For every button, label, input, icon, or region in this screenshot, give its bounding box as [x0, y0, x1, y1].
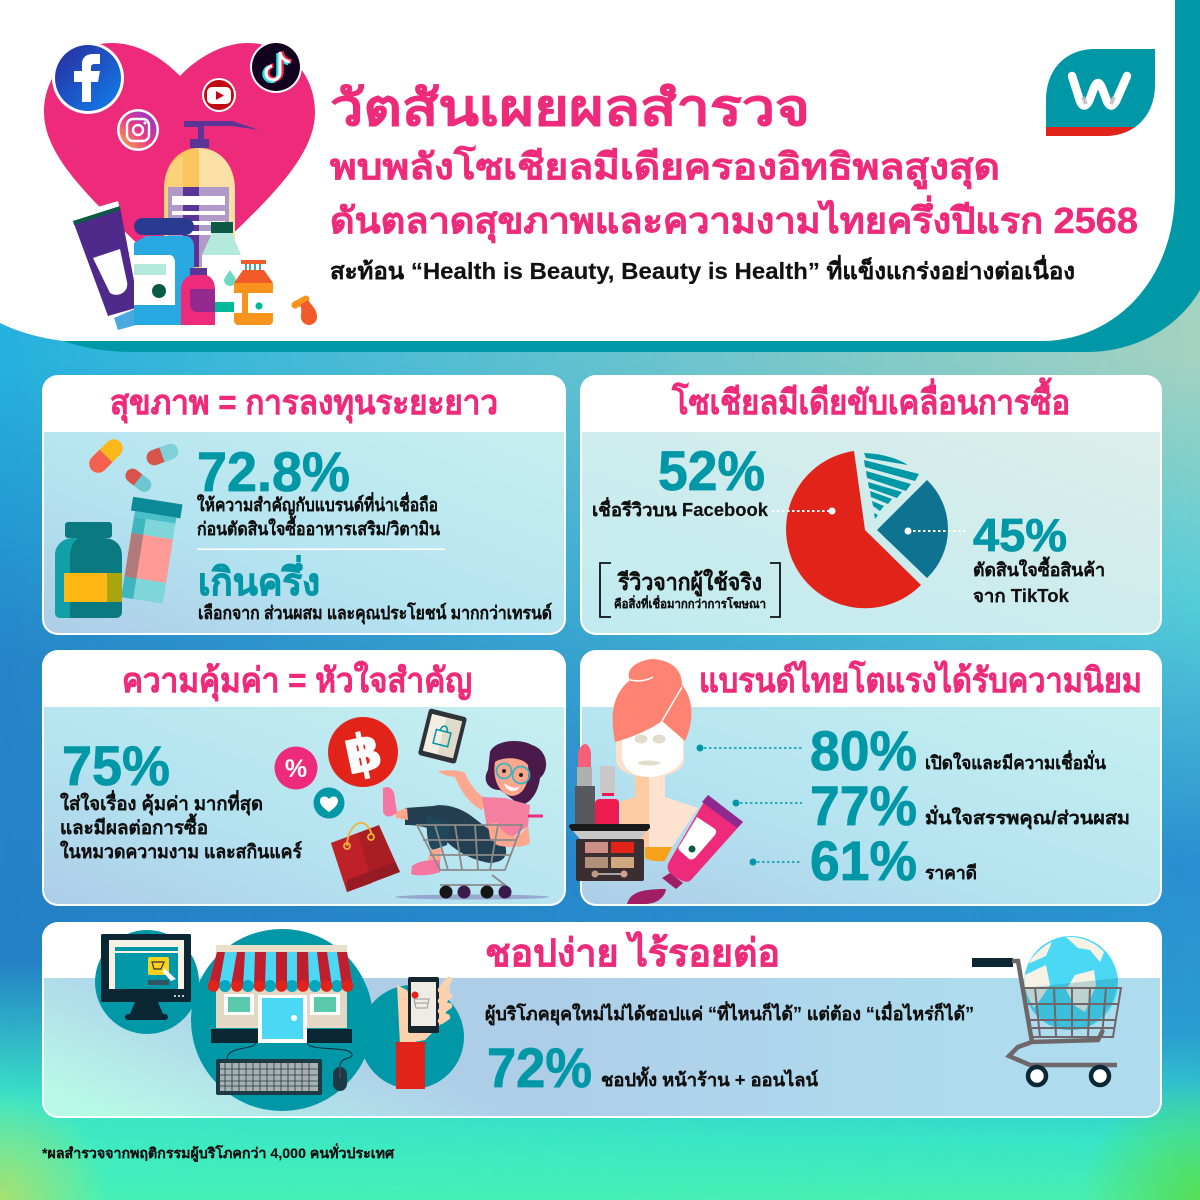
icon: lipstick	[575, 744, 595, 826]
subtitle line 2: ดันตลาดสุขภาพและความงามไทยครึ่งปีแรก 2568	[330, 195, 1138, 244]
text: value detail: ในหมวดความงาม และสกินแคร์	[60, 840, 303, 863]
cart basket	[417, 825, 522, 885]
icon: shopping bag	[331, 823, 400, 892]
stat 80%: 80%	[810, 719, 917, 782]
icon: teal bottle	[55, 522, 122, 618]
panel: health is investment	[42, 375, 566, 635]
pump bottle	[164, 121, 259, 290]
panel: Thai brands	[569, 650, 1162, 906]
text: consumers: ผู้บริโภคยุคใหม่ไม่ได้ชอปแค่ “ที่ไหนก็ได้” แต่ต้อง “เมื่อไหร่ก็ได้”	[485, 1001, 974, 1026]
icon: facebook	[52, 42, 124, 114]
illustration: globe in cart	[972, 936, 1121, 1085]
stat 72%: 72%	[487, 1036, 592, 1099]
text: tiktok decision: จาก TikTok	[973, 586, 1070, 606]
panel: value for money	[42, 650, 566, 906]
leaf	[627, 889, 666, 904]
stat 72.8%: 72.8%	[197, 440, 350, 503]
illustration: face mask woman	[613, 659, 698, 861]
callout: real user reviews: คือสิ่งที่เชื่อมากกว่าการโฆษณา	[614, 595, 766, 611]
icon: keyboard	[216, 1043, 352, 1095]
text: facebook reviews: เชื่อรีวิวบน Facebook	[592, 497, 769, 520]
face	[616, 735, 684, 777]
heading: โซเชียลมีเดียขับเคลื่อนการซื้อ	[671, 377, 1070, 422]
legs	[405, 805, 506, 863]
heading: ชอปง่าย ไร้รอยต่อ	[485, 931, 780, 975]
stat 61%: 61%	[810, 829, 917, 892]
page background	[0, 290, 1200, 1200]
pink bottle	[181, 268, 215, 325]
towel	[613, 659, 691, 742]
tube	[71, 201, 139, 330]
icon: computer	[101, 934, 191, 1020]
stat 77%: มั่นใจสรรพคุณ/ส่วนผสม	[925, 805, 1130, 830]
text: trusted brands	[197, 492, 441, 539]
callout: real user reviews	[600, 563, 780, 617]
orange collar	[645, 847, 672, 861]
icon: hand with phone	[396, 977, 450, 1089]
illustration: heart with products	[44, 41, 317, 330]
connector 61%	[750, 858, 802, 866]
stat 77%	[810, 774, 1130, 837]
stat 77%: 77%	[810, 774, 917, 837]
text: value detail: และมีผลต่อการซื้อ	[60, 813, 208, 839]
icon: nail polish	[595, 766, 619, 826]
wheels	[440, 886, 512, 898]
stat 80%	[810, 719, 1107, 782]
neck and shoulders	[620, 770, 698, 847]
title: วัตสันเผยผลสำรวจ	[330, 80, 810, 136]
heading: สุขภาพ = การลงทุนระยะยาว	[110, 384, 498, 424]
icon: tiktok	[250, 41, 302, 93]
shoes	[383, 787, 397, 816]
header band shape	[63, 0, 1200, 352]
icon: baht coin: ฿	[340, 722, 387, 786]
panel: header	[0, 0, 1175, 341]
panel: social media drives purchase	[580, 375, 1162, 635]
callout: real user reviews: รีวิวจากผู้ใช้จริง	[616, 568, 762, 597]
text: tiktok decision	[973, 556, 1105, 606]
panel: seamless shopping	[42, 922, 1162, 1118]
illustration: omnichannel	[95, 929, 464, 1111]
icon: pills	[85, 435, 181, 495]
icon: youtube	[202, 78, 236, 112]
stat 75%: 75%	[62, 734, 170, 797]
orange bottle	[234, 260, 273, 325]
stat more than half: เกินครึ่ง	[198, 555, 320, 604]
arm on cart	[488, 822, 530, 847]
icon: percent: %	[285, 755, 307, 783]
icon: percent	[274, 746, 318, 790]
stat 80%: เปิดใจและมีความเชื่อมั่น	[925, 750, 1107, 773]
tagline: สะท้อน “Health is Beauty, Beauty is Health” ที่แข็งแกร่งอย่างต่อเนื่อง	[330, 254, 1075, 284]
dropper	[295, 299, 317, 325]
pie chart	[772, 451, 968, 608]
logo: Watsons	[1046, 49, 1155, 136]
text: trusted brands: ก่อนตัดสินใจซื้ออาหารเสริม/วิตามิน	[197, 515, 441, 539]
illustration: woman in cart	[383, 741, 549, 900]
face and neck	[494, 758, 528, 796]
text: tiktok decision: ตัดสินใจซื้อสินค้า	[973, 556, 1105, 580]
connector 80%	[696, 744, 802, 752]
white bottle	[202, 222, 241, 312]
stat 45%: 45%	[973, 509, 1067, 561]
heading: แบรนด์ไทยโตแรงได้รับความนิยม	[699, 660, 1142, 700]
cart shadow	[395, 894, 549, 900]
text: trusted brands: ให้ความสำคัญกับแบรนด์ที่น่าเชื่อถือ	[197, 492, 438, 516]
text: value detail	[60, 790, 303, 863]
stat 52%: 52%	[658, 439, 765, 502]
shirt	[482, 797, 530, 850]
connector 77%	[732, 800, 802, 806]
skin legs	[395, 808, 408, 820]
icon: instagram	[117, 109, 159, 151]
text: value detail: ใส่ใจเรื่อง คุ้มค่า มากที่สุด	[60, 790, 263, 816]
icon: heart	[314, 788, 344, 818]
text: ingredients: เลือกจาก ส่วนผสม และคุณประโยชน์ มากกว่าเทรนด์	[198, 602, 552, 625]
icon: storefront	[208, 945, 353, 1043]
subtitle line 1: พบพลังโซเชียลมีเดียครองอิทธิพลสูงสุด	[330, 145, 1000, 190]
icon: eyeshadow palette	[569, 824, 650, 881]
stat 61%	[810, 829, 977, 892]
arm raised	[438, 770, 488, 810]
footnote: *ผลสำรวจจากพฤติกรรมผู้บริโภคกว่า 4,000 คนทั่วประเทศ	[42, 1143, 395, 1162]
icon: tilted bottle	[117, 497, 183, 604]
jar	[134, 218, 194, 325]
stat 61%: ราคาดี	[925, 863, 977, 883]
icon: tablet	[418, 708, 467, 764]
heading: ความคุ้มค่า = หัวใจสำคัญ	[122, 660, 472, 702]
icon: baht coin	[328, 717, 398, 787]
hair	[486, 741, 546, 805]
icon: mouse	[333, 1067, 347, 1091]
heart	[44, 43, 315, 285]
icon: tube	[662, 795, 743, 889]
text: omnichannel: ชอปทั้ง หน้าร้าน + ออนไลน์	[601, 1066, 819, 1090]
